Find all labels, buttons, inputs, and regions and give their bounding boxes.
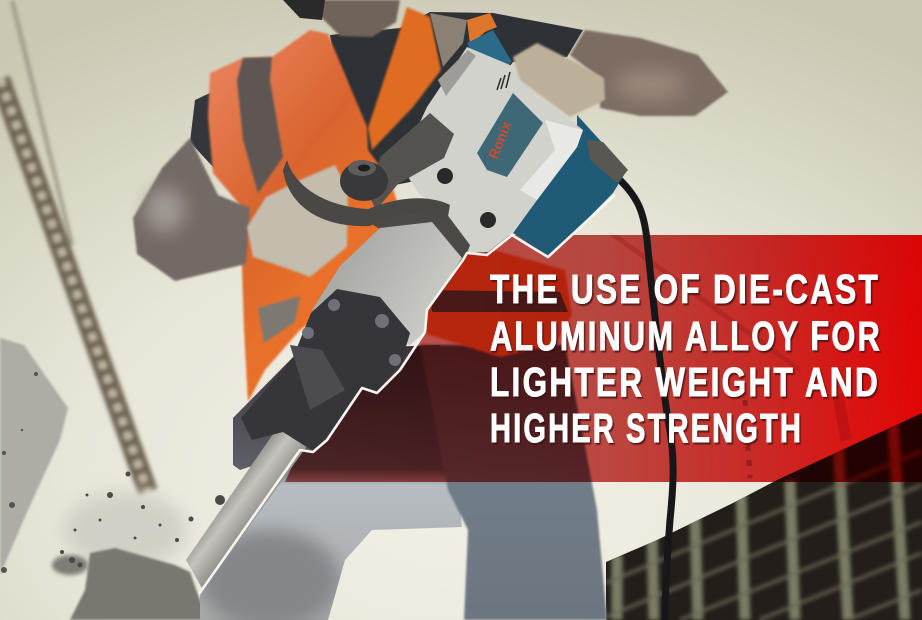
reflective stripe lower [258, 296, 300, 343]
arm right [570, 30, 728, 116]
broken rubble [70, 548, 207, 620]
dust on left leg [200, 530, 340, 620]
body grey [400, 47, 583, 253]
concrete block [0, 338, 68, 575]
band crane silhouettes [600, 225, 846, 478]
reflective stripe under band [430, 290, 568, 312]
bolts [437, 168, 496, 228]
vest right panel [368, 7, 441, 150]
left leg [200, 345, 462, 620]
left glove [247, 165, 348, 277]
power cord [620, 180, 673, 620]
white panel [520, 120, 583, 200]
chisel bit [186, 424, 310, 590]
dark side panel [370, 113, 454, 210]
band: red translucent [285, 235, 922, 482]
chisel head [241, 289, 410, 451]
blue top [467, 30, 512, 70]
left sleeve [190, 92, 225, 180]
helmet strap [283, 0, 325, 20]
vest body [208, 30, 572, 402]
vents [497, 72, 510, 90]
arm left [133, 138, 250, 281]
white outline [199, 195, 615, 594]
beard [312, 0, 400, 37]
brand: Ronix [485, 119, 514, 161]
chuck highlight [290, 345, 345, 410]
worker legs [200, 345, 607, 620]
crane tower [0, 0, 148, 492]
bolts on head [302, 299, 401, 366]
headline [490, 266, 882, 451]
label plate [477, 93, 543, 177]
headline: HIGHER STRENGTH [490, 405, 803, 451]
top recess [438, 50, 476, 96]
collar [368, 205, 470, 285]
right glove [513, 43, 605, 117]
reflective stripe vertical [237, 57, 283, 193]
vest shoulder [430, 13, 467, 67]
rotary hammer drill [241, 30, 628, 451]
blue motor housing [513, 115, 627, 257]
barrel [312, 222, 462, 345]
rubble dust cloud [52, 472, 225, 575]
end cap [587, 140, 628, 183]
right leg [420, 345, 607, 620]
building [606, 413, 922, 620]
safety vest and shirt [190, 0, 583, 402]
handle knob [340, 160, 388, 201]
side handle [283, 160, 450, 226]
dark shirt [330, 12, 583, 190]
